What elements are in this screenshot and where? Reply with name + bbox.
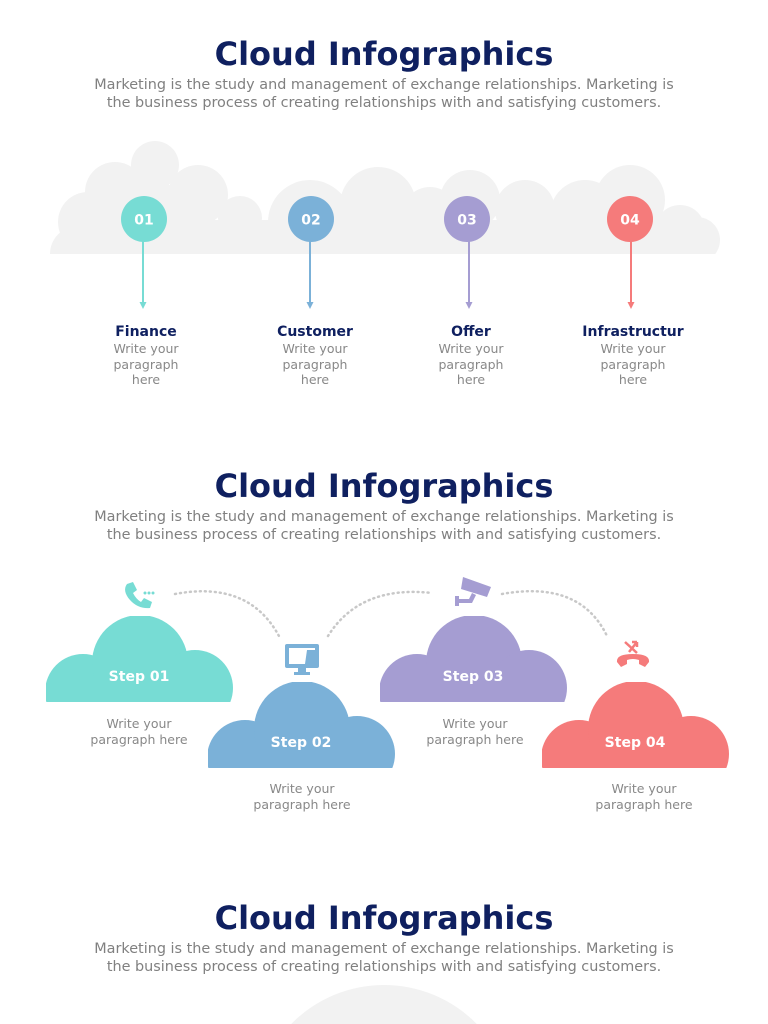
cloud step 01: Step 01 [109, 669, 169, 685]
marker 01: 01 [134, 212, 154, 228]
partial gray circle [292, 985, 476, 1024]
background cloud [50, 141, 720, 254]
subtitle 3: Marketing is the study and management of exchange relationships. Marketing is the business process of creating relationships with and satisfying customers. [94, 941, 674, 974]
cloud step 02 [208, 682, 395, 768]
text step 03: Write your [442, 716, 508, 731]
label: Finance: here [132, 372, 160, 387]
subtitle 2: Marketing is the study and management of exchange relationships. Marketing is the business process of creating relationships with and satisfying customers. [94, 509, 674, 542]
cloud step 03 [380, 616, 567, 702]
text step 04: paragraph here [595, 796, 693, 812]
subtitle 1: Marketing is the study and management of exchange relationships. Marketing is the business process of creating relationships with and satisfying customers. [94, 77, 674, 110]
marker 01 [121, 196, 167, 309]
label: Infrastructure [582, 324, 684, 387]
icon: hang up phone [617, 642, 649, 667]
cloud step 01 [46, 616, 233, 702]
icon: monitor [285, 644, 319, 675]
label: Offer: here [457, 372, 485, 387]
label: Infrastructure: paragraph [600, 356, 665, 372]
cloud step 04 [542, 682, 729, 768]
label: Finance: paragraph [114, 356, 178, 372]
title 1: Cloud Infographics [215, 35, 553, 73]
text step 03: paragraph here [426, 732, 524, 746]
label: Offer [438, 324, 504, 387]
marker 03 [444, 196, 490, 309]
diagram 1: cloud timeline [50, 141, 720, 309]
label: Finance: Write your [113, 341, 179, 356]
marker 04: 04 [620, 212, 640, 228]
label: Infrastructure: Infrastructur [582, 324, 684, 340]
label: Customer: Customer [277, 324, 353, 340]
marker 02 [288, 196, 334, 309]
label: Offer: Write your [438, 341, 504, 356]
label: Finance [113, 324, 179, 387]
text step 01: Write your [106, 716, 172, 731]
text step 03 [426, 716, 524, 746]
label: Customer: here [301, 372, 329, 387]
text step 01 [90, 716, 188, 746]
cloud step 03: Step 03 [443, 669, 503, 685]
label: Offer: Offer [451, 324, 491, 340]
icon: camera [455, 577, 491, 606]
label: Customer: paragraph [282, 356, 347, 372]
text step 02: Write your [269, 781, 335, 796]
label: Infrastructure: Write your [600, 341, 666, 356]
dotted arcs [175, 591, 607, 638]
icon: phone [125, 582, 154, 608]
label: Finance: Finance [115, 324, 177, 340]
title 2: Cloud Infographics [215, 467, 553, 505]
marker 04 [607, 196, 653, 309]
text step 02: paragraph here [253, 796, 351, 812]
text step 02 [253, 781, 351, 812]
label: Infrastructure: here [619, 372, 647, 387]
label: Offer: paragraph [438, 356, 503, 372]
text step 01: paragraph here [90, 732, 188, 746]
diagram 2: step clouds [46, 577, 729, 768]
marker 02: 02 [301, 212, 321, 228]
label: Customer [277, 324, 353, 387]
marker 03: 03 [457, 212, 477, 228]
text step 04: Write your [611, 781, 677, 796]
cloud step 02: Step 02 [271, 735, 331, 751]
label: Customer: Write your [282, 341, 348, 356]
cloud step 04: Step 04 [605, 735, 666, 751]
text step 04 [595, 781, 693, 812]
title 3: Cloud Infographics [215, 899, 553, 937]
